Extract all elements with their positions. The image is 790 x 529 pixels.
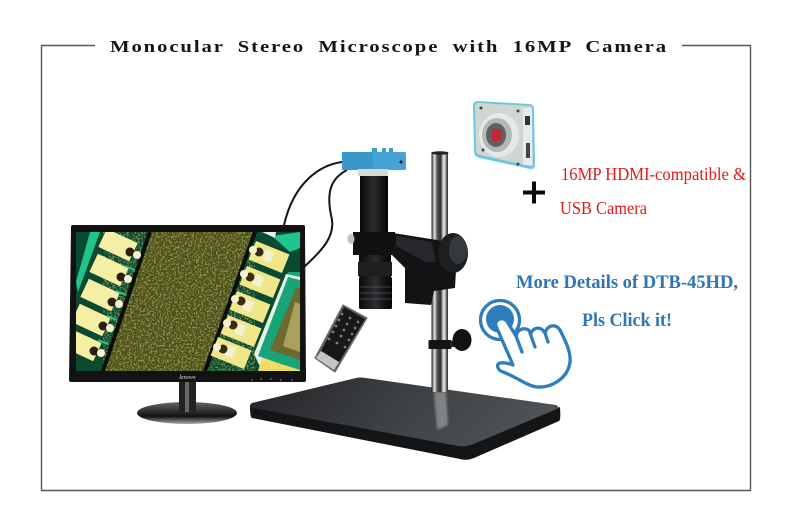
left solder pads bbox=[76, 232, 138, 362]
objective lens bbox=[359, 277, 392, 309]
remote control bbox=[315, 305, 367, 372]
blue link text: Pls Click it! bbox=[582, 310, 672, 331]
collar bbox=[353, 232, 395, 255]
plus sign bbox=[523, 182, 545, 204]
monitor screen bbox=[62, 229, 300, 371]
red camera label: 16MP HDMI-compatible & bbox=[561, 164, 746, 184]
bracket bbox=[392, 233, 456, 305]
cables bbox=[284, 162, 347, 268]
stand base plate bbox=[250, 378, 560, 460]
title: Monocular Stereo Microscope with 16MP Camera bbox=[110, 37, 668, 56]
monitor stand bbox=[137, 381, 237, 424]
blue link text: More Details of DTB-45HD, bbox=[516, 272, 738, 293]
sample band bbox=[103, 232, 255, 371]
blue link text bbox=[516, 272, 738, 331]
microscope bbox=[342, 148, 468, 309]
pillar bbox=[432, 151, 448, 392]
right solder pads bbox=[211, 241, 289, 369]
frame border bbox=[42, 46, 750, 490]
lens ring bbox=[358, 169, 388, 176]
red camera label: USB Camera bbox=[560, 198, 647, 218]
monitor bezel bbox=[69, 225, 306, 382]
red camera label bbox=[560, 164, 746, 218]
chip on right bbox=[256, 272, 300, 371]
lock collar and knob bbox=[428, 329, 472, 351]
focus knob bbox=[438, 233, 468, 273]
barrel bbox=[359, 255, 391, 277]
left green traces bbox=[98, 266, 135, 344]
camera body bbox=[342, 148, 406, 170]
monitor buttons bbox=[251, 378, 293, 381]
monitor bbox=[62, 225, 306, 424]
monitor brand: lenovo bbox=[179, 375, 196, 381]
icon: pointing hand bbox=[480, 300, 570, 387]
tube bbox=[360, 176, 388, 232]
camera product photo bbox=[473, 101, 535, 169]
